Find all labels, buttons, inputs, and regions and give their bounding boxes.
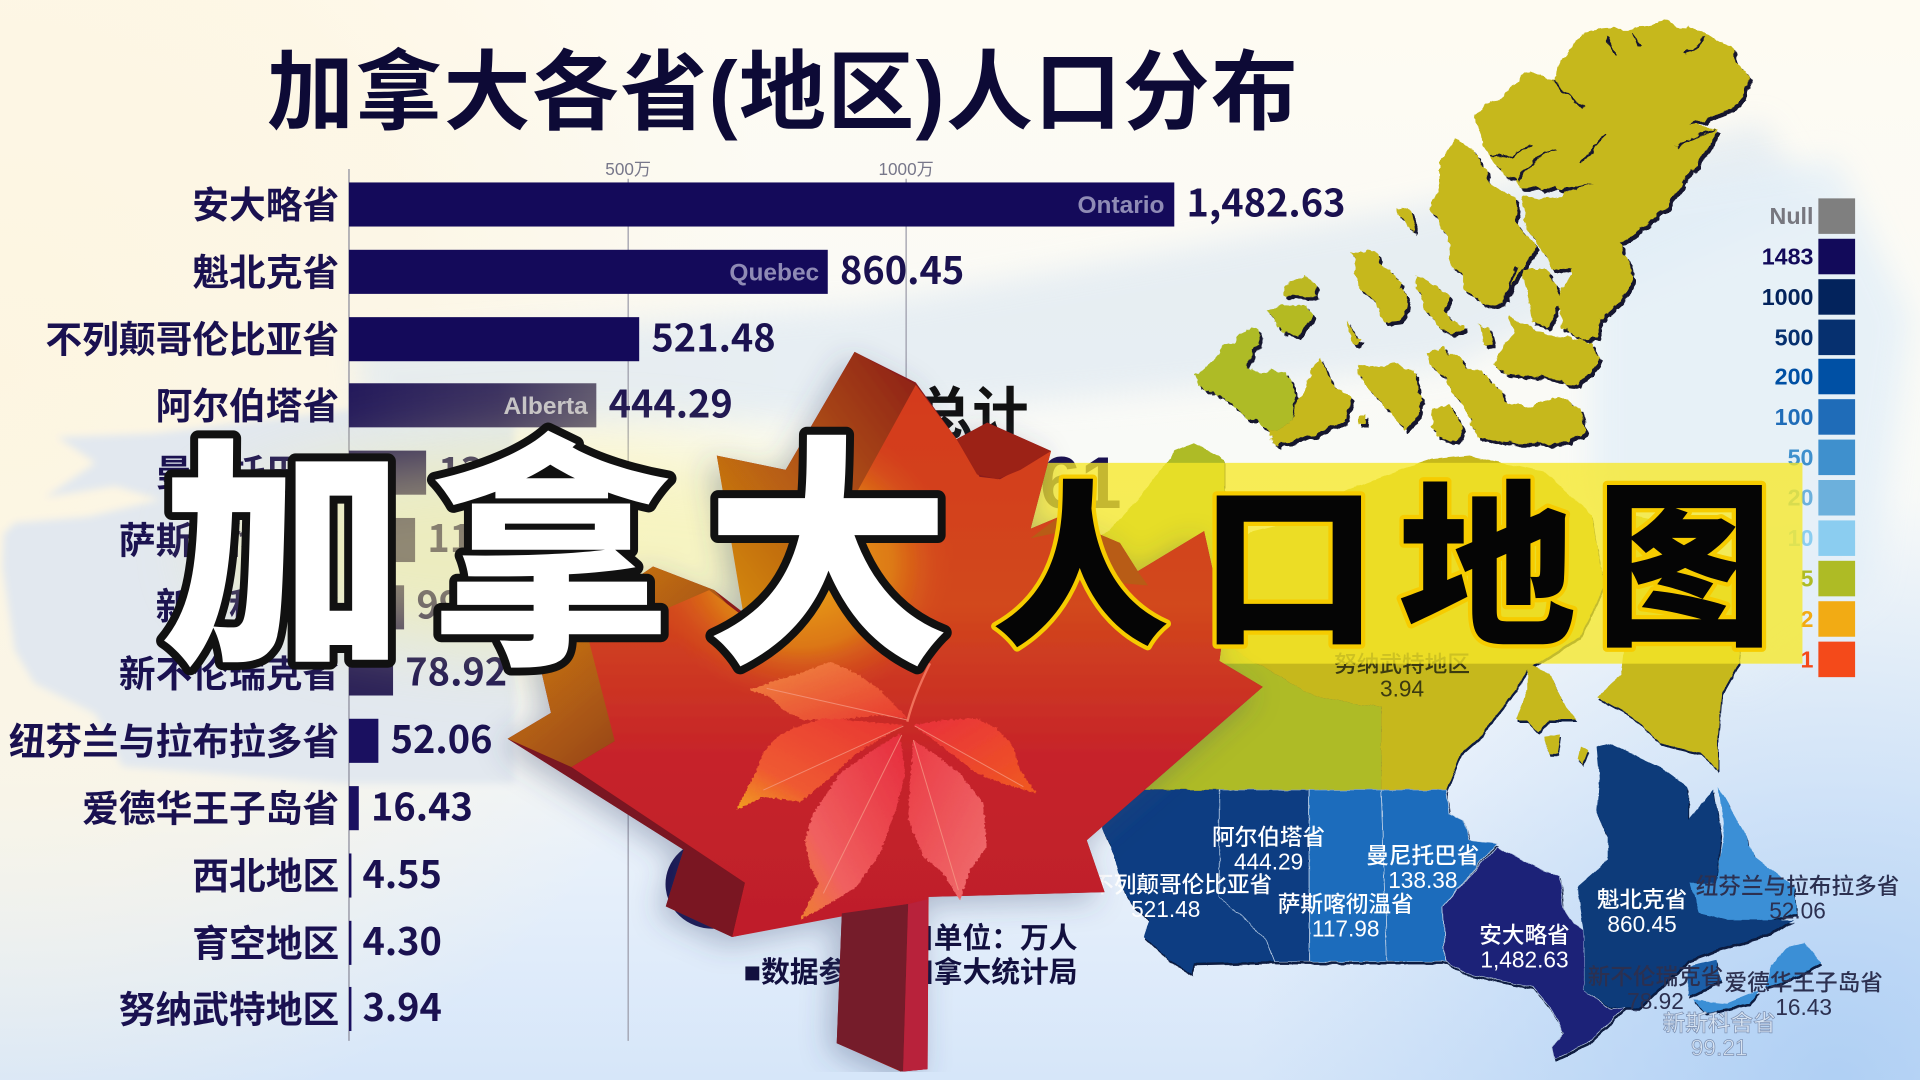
- map value labels: 萨斯喀彻温省: [1278, 891, 1414, 917]
- bar chart: population by province: 1000万: [879, 159, 934, 179]
- bar chart: population by province: 纽芬兰与拉布拉多省: [9, 721, 339, 762]
- leaf stem right face: [903, 899, 928, 1072]
- bar chart: population by province: 曼尼托巴省: [156, 453, 339, 494]
- map value labels: 安大略省: [1479, 922, 1570, 948]
- map value labels: 138.38: [1388, 867, 1457, 893]
- island: Meighen: [1398, 207, 1415, 232]
- legend: 1000: [1762, 284, 1813, 310]
- map value labels: 52.06: [1769, 897, 1826, 923]
- province: Alberta: [1219, 790, 1309, 962]
- yellow banner: [857, 463, 1802, 664]
- bar chart: population by province: Ontario: [1077, 192, 1164, 219]
- big title: 加拿大: 加: [160, 360, 405, 715]
- source notes: ■数据参考自加拿大统计局: [744, 956, 1078, 989]
- island: Somerset: [1358, 363, 1422, 430]
- province: New Brunswick: [1688, 960, 1721, 997]
- legend: [1762, 198, 1855, 677]
- source notes: [744, 922, 1078, 989]
- leaf left arm: [508, 567, 745, 767]
- big title: 加拿大: 大: [705, 360, 950, 715]
- bar chart: population by province: 萨斯喀彻温省: [119, 520, 339, 561]
- province: Ontario: [1443, 847, 1624, 1058]
- bar chart: population by province: [9, 159, 1345, 1041]
- island: Ellesmere: [1474, 22, 1751, 340]
- bar chart: population by province: 3.94: [362, 977, 442, 1032]
- title: 加拿大各省(地区)人口分布: [267, 44, 1298, 141]
- fjord channels: [1491, 33, 1714, 300]
- bar chart: population by province: 安大略省: [192, 185, 339, 226]
- map value labels: 78.92: [1627, 988, 1684, 1014]
- territory: Nunavut mainland: [1182, 456, 1604, 790]
- bar chart: population by province: 16.43: [371, 776, 473, 831]
- island: Ellef Ringnes: [1349, 248, 1410, 323]
- bar chart: population by province: 444.29: [609, 374, 733, 429]
- total block: 总计: [916, 382, 1029, 445]
- bar chart: population by province: 新斯科舍省: [156, 587, 339, 628]
- bar chart: population by province: 521.48: [651, 307, 776, 362]
- legend: 5: [1801, 566, 1814, 592]
- bar chart: population by province: 860.45: [840, 240, 964, 295]
- province: Nova Scotia: [1694, 990, 1760, 1013]
- big title: 加拿大: [160, 360, 950, 715]
- big title: 加拿大: 拿: [429, 360, 673, 715]
- island: Prince Patrick: [1282, 275, 1317, 297]
- map value labels: [1091, 651, 1899, 1061]
- island: Devon: [1494, 315, 1602, 383]
- island: Amund Ringnes: [1415, 275, 1464, 333]
- bar chart: population by province: 4.55: [362, 844, 442, 899]
- bar chart: population by province: 52.06: [391, 709, 492, 764]
- island: Axel Heiberg: [1430, 140, 1535, 303]
- leaf stem left face: [837, 904, 908, 1072]
- bar chart: population by province: 不列颠哥伦比亚省: [45, 320, 339, 361]
- map value labels: 新斯科舍省: [1663, 1010, 1776, 1036]
- province: Newfoundland: [1766, 943, 1821, 987]
- map value labels: 阿尔伯塔省: [1212, 824, 1325, 850]
- island: Melville small: [1268, 303, 1312, 337]
- legend: 500: [1775, 324, 1813, 350]
- leaf right bump shade: [1031, 517, 1148, 585]
- bar chart: population by province: 努纳武特地区: [119, 989, 339, 1030]
- map value labels: 努纳武特地区: [1334, 651, 1470, 677]
- legend: 1: [1801, 646, 1814, 672]
- bar chart: population by province: 500万: [605, 159, 651, 179]
- map: mainland Canada: [980, 443, 1751, 790]
- legend: 50: [1788, 444, 1813, 470]
- big title: 人口地图: 地: [1398, 426, 1576, 683]
- map: southern provinces: [1103, 743, 1821, 1058]
- map value labels: 521.48: [1131, 896, 1200, 922]
- legend: 10: [1788, 525, 1813, 551]
- big title: 人口地图: 图: [1596, 426, 1773, 683]
- map value labels: 1,482.63: [1480, 946, 1569, 972]
- map value labels: 爱德华王子岛省: [1724, 970, 1883, 996]
- leaf extrusion silhouette: [508, 352, 1263, 1072]
- bar chart: population by province: Alberta: [503, 393, 588, 420]
- bar chart: population by province: 1,482.63: [1187, 173, 1345, 228]
- island: Banks: [1196, 328, 1297, 430]
- province: Quebec: [1577, 743, 1794, 1008]
- province: British Columbia: [1103, 790, 1275, 974]
- bar chart: population by province: 育空地区: [192, 923, 339, 964]
- bar chart: population by province: Quebec: [729, 259, 819, 286]
- province: Saskatchewan: [1309, 790, 1387, 962]
- map value labels: 860.45: [1607, 911, 1677, 937]
- island: Victoria: [1268, 358, 1351, 447]
- small leaf cluster: [736, 662, 1037, 920]
- big title: 人口地图: 人: [992, 426, 1169, 683]
- bar chart: population by province: 138.38: [438, 441, 563, 496]
- big title: 人口地图: [992, 426, 1773, 683]
- map value labels: 444.29: [1234, 848, 1303, 874]
- bar chart: population by province: 99.21: [416, 574, 518, 629]
- total block: [671, 382, 1122, 923]
- bar chart: population by province: 阿尔伯塔省: [156, 386, 339, 427]
- map value labels: 曼尼托巴省: [1366, 842, 1479, 868]
- source notes: ■人口单位：万人: [859, 922, 1078, 955]
- legend: 100: [1775, 404, 1813, 430]
- leaf top-left arm: [717, 352, 916, 623]
- leaf lower-left extrusion: [508, 739, 745, 937]
- territory: Melville Peninsula and Hudson islands: [1516, 663, 1588, 765]
- bar chart: population by province: 117.98: [427, 508, 552, 563]
- bar chart: population by province: 78.92: [405, 642, 507, 697]
- bar chart: population by province: 4.30: [362, 911, 442, 966]
- island: Prince of Wales: [1432, 403, 1464, 443]
- legend: 2: [1801, 606, 1813, 632]
- legend: 20: [1788, 485, 1813, 511]
- bar chart: population by province: 新不伦瑞克省: [119, 654, 339, 695]
- glow behind big title: [208, 451, 918, 647]
- map value labels: 16.43: [1775, 994, 1832, 1020]
- bar chart: population by province: 爱德华王子岛省: [82, 789, 339, 830]
- leaf front face: [571, 385, 1263, 1072]
- territory: Baffin Island: [1597, 514, 1751, 770]
- legend: 200: [1775, 363, 1813, 389]
- total block: 3,824.61: [836, 441, 1122, 524]
- map value labels: 纽芬兰与拉布拉多省: [1696, 873, 1899, 899]
- icon: 3D maple leaf: [508, 352, 1263, 1072]
- province: Labrador: [1691, 787, 1796, 920]
- legend: 1483: [1762, 243, 1814, 269]
- map value labels: 新不伦瑞克省: [1588, 963, 1723, 989]
- bar chart: population by province: 西北地区: [192, 856, 339, 897]
- province: Manitoba: [1381, 790, 1497, 962]
- map value labels: 不列颠哥伦比亚省: [1091, 872, 1272, 898]
- map value labels: 魁北克省: [1597, 886, 1687, 912]
- leaf glow: [589, 385, 1031, 741]
- map value labels: 99.21: [1691, 1035, 1748, 1061]
- legend: Null: [1770, 203, 1813, 229]
- big title: 人口地图: 口: [1200, 426, 1378, 683]
- leaf top notch shade: [957, 423, 1051, 479]
- map value labels: 117.98: [1312, 916, 1380, 942]
- small islets: [1346, 320, 1491, 423]
- island: Bathurst: [1427, 348, 1587, 443]
- map: Arctic islands: [1196, 22, 1751, 447]
- map value labels: 3.94: [1380, 676, 1424, 702]
- bar chart: population by province: 魁北克省: [192, 252, 339, 293]
- territories: Yukon and Northwest Territories: [980, 443, 1381, 790]
